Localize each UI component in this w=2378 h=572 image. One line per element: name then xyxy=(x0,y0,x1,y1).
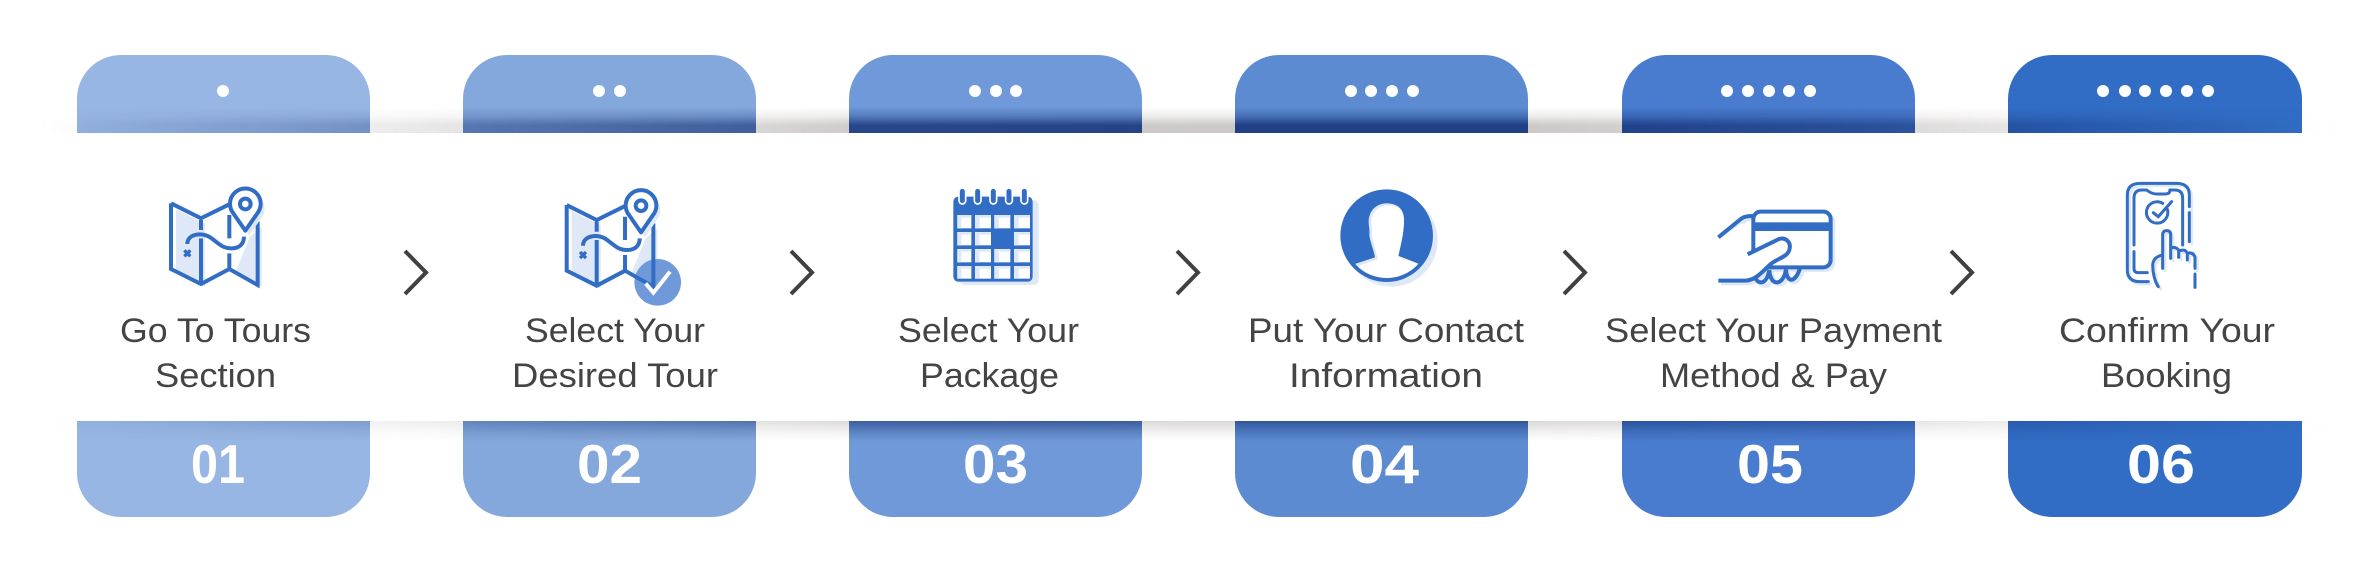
step 6 number: 06 xyxy=(2127,433,2195,495)
step 3 dots xyxy=(969,85,1022,97)
step 5 label: Method & Pay xyxy=(1660,357,1887,395)
step 5 xyxy=(1605,55,1943,517)
step 5 number: 05 xyxy=(1737,433,1803,495)
step 3 number tab xyxy=(849,421,1142,517)
icon: calendar xyxy=(953,188,1039,285)
icon: hand holding credit card xyxy=(1718,212,1833,286)
step 4 number: 04 xyxy=(1350,433,1419,495)
icon: map with pin xyxy=(171,188,265,287)
icon: phone with tap gesture xyxy=(2127,183,2197,289)
step 6 label: Confirm Your xyxy=(2059,312,2275,350)
step 1 label: Go To Tours xyxy=(120,312,311,350)
step 2 label xyxy=(512,312,718,395)
step 6 xyxy=(2008,55,2302,517)
step 5 top tab xyxy=(1622,55,1915,133)
step 6 top tab xyxy=(2008,55,2302,133)
arrow 4 xyxy=(1564,251,1585,294)
step 2 number tab xyxy=(463,421,756,517)
arrow 1 xyxy=(405,251,426,294)
step 3 label: Select Your xyxy=(898,312,1079,350)
step 2 label: Select Your xyxy=(525,312,705,350)
step 3 top tab xyxy=(849,55,1142,133)
step 1 number: 01 xyxy=(191,433,245,495)
step 2 label: Desired Tour xyxy=(512,357,718,395)
step 3 label: Package xyxy=(920,357,1059,395)
step 2 top tab xyxy=(463,55,756,133)
step 5 number tab xyxy=(1622,421,1915,517)
arrow 5 xyxy=(1951,251,1972,294)
step 2 xyxy=(463,55,756,517)
step 3 label xyxy=(898,312,1079,395)
step 4 label: Put Your Contact xyxy=(1248,312,1525,350)
step 1 xyxy=(77,55,370,517)
step 1 number tab xyxy=(77,421,370,517)
step 4 xyxy=(1235,55,1528,517)
step 4 top tab xyxy=(1235,55,1528,133)
step 2 number: 02 xyxy=(577,433,642,495)
step 5 dots xyxy=(1721,85,1816,97)
step 2 dots xyxy=(593,85,626,97)
step 3 number: 03 xyxy=(963,433,1028,495)
step 6 dots xyxy=(2097,85,2214,97)
step 5 label xyxy=(1605,312,1943,395)
step 5 label: Select Your Payment xyxy=(1605,312,1943,350)
step 4 label: Information xyxy=(1289,357,1483,395)
step 1 top tab xyxy=(77,55,370,133)
step 6 label xyxy=(2059,312,2275,395)
step 1 label: Section xyxy=(155,357,276,395)
step 6 label: Booking xyxy=(2101,357,2232,395)
arrow 2 xyxy=(791,251,812,294)
icon: map with pin and check xyxy=(567,190,681,306)
icon: person avatar xyxy=(1340,189,1438,287)
shadow: grey band behind the tabs xyxy=(40,107,2340,441)
step 3 xyxy=(849,55,1142,517)
step 4 label xyxy=(1248,312,1525,395)
infographic: six-step booking process xyxy=(77,55,2302,517)
step 1 label xyxy=(120,312,311,395)
shadow: darkening across the tabs xyxy=(40,107,2340,441)
step 6 number tab xyxy=(2008,421,2302,517)
step 4 dots xyxy=(1345,85,1419,97)
arrow 3 xyxy=(1177,251,1198,294)
step 1 dots xyxy=(217,85,229,97)
step 4 number tab xyxy=(1235,421,1528,517)
